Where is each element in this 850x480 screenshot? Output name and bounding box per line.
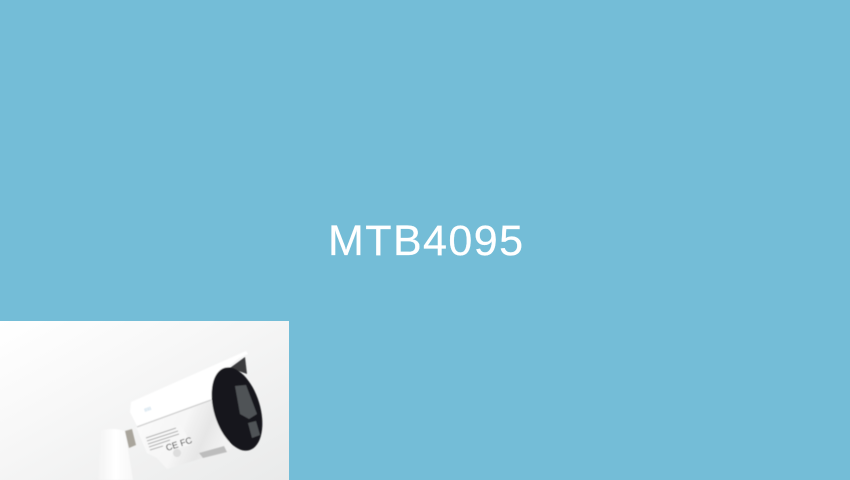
sensor dot: [173, 449, 181, 457]
brand mark: IIIII: [144, 406, 152, 414]
certification marks: CE FC: [165, 435, 194, 453]
sensor panel: [248, 421, 260, 438]
mounting arm: [98, 429, 133, 480]
barcode label: [199, 446, 227, 458]
sun hood: [130, 351, 248, 426]
photo: security camera: [0, 321, 289, 480]
metal joint: [125, 429, 136, 448]
camera body: [136, 400, 232, 469]
camera illustration: [98, 351, 272, 480]
lens window: [235, 385, 257, 419]
photo background: [0, 321, 289, 480]
sticker text lines: [146, 428, 179, 450]
inner hood shadow: [230, 357, 247, 374]
label sticker: [144, 424, 191, 454]
title: MTB4095: [328, 217, 523, 265]
body seam: [137, 400, 211, 427]
lens housing: [202, 361, 272, 457]
